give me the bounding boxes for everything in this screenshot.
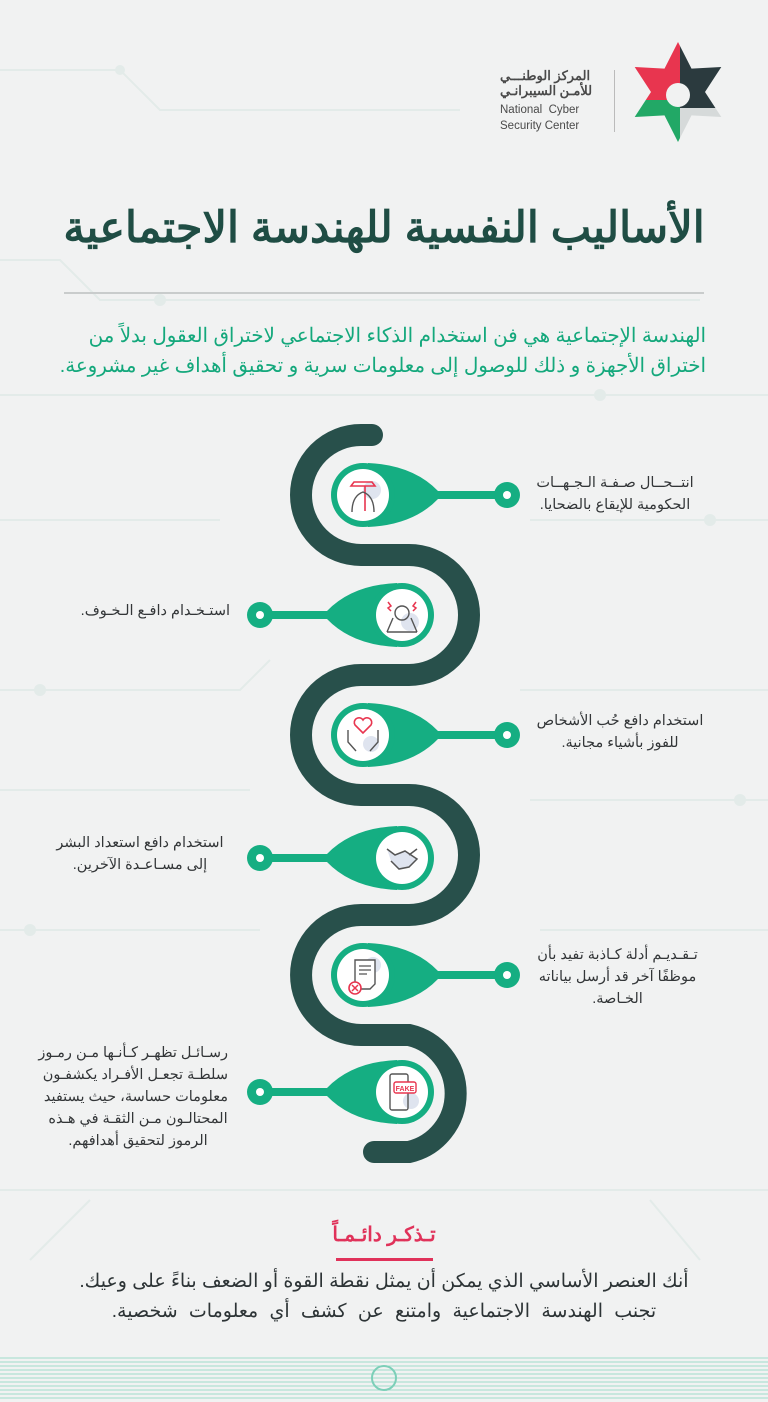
footer stripes — [0, 1358, 768, 1398]
node 1: impersonation — [331, 463, 520, 527]
logo text: National Cyber — [500, 104, 579, 116]
text 2: استـخـدام دافـع الـخـوف. — [81, 603, 230, 619]
title: الأساليب النفسية للهندسة الاجتماعية — [63, 204, 705, 252]
intro text — [60, 322, 706, 377]
node 4: helping — [247, 826, 434, 890]
text 3: استخدام دافع حُب الأشخاص — [537, 713, 703, 729]
logo star — [634, 42, 722, 142]
logo text: للأمـن السيبرانـي — [500, 83, 592, 98]
text 4 — [56, 835, 224, 873]
text 5 — [537, 944, 698, 1007]
logo text: المركز الوطنـــي — [500, 68, 590, 83]
node 5: fake evidence — [331, 943, 520, 1007]
logo — [500, 42, 722, 142]
text 4: إلى مسـاعـدة الآخرين. — [73, 857, 207, 873]
text 6: الرموز لتحقيق أهدافهم. — [68, 1133, 208, 1149]
remember text — [79, 1268, 689, 1322]
node 2: fear — [247, 583, 434, 647]
text 6: سلطـة تجعـل الأفـراد يكشفـون — [43, 1067, 228, 1083]
text 6: معلومات حساسة، حيث يستفيد — [44, 1089, 228, 1105]
text 5: الخـاصة. — [592, 991, 643, 1007]
logo text: Security Center — [500, 120, 579, 132]
text 6: رسـائـل تظهـر كـأنـها مـن رمـوز — [38, 1045, 228, 1061]
node 6: fake messages: FAKE — [396, 1086, 415, 1093]
text 3 — [537, 712, 703, 751]
text 4: استخدام دافع استعداد البشر — [56, 835, 224, 851]
text 1: انتــحــال صـفـة الـجـهــات — [536, 475, 694, 491]
intro text: اختراق الأجهزة و ذلك للوصول إلى معلومات سرية و تحقيق أهداف غير مشروعة. — [60, 355, 706, 377]
text 3: للفوز بأشياء مجانية. — [561, 735, 679, 751]
remember heading: تـذكـر دائـمـاً — [332, 1224, 436, 1246]
text 5: موظفًا آخر قد أرسل بياناته — [539, 969, 696, 985]
node 6: fake messages — [247, 1060, 434, 1124]
intro text: الهندسة الإجتماعية هي فن استخدام الذكاء الاجتماعي لاختراق العقول بدلاً من — [89, 325, 706, 347]
text 5: تـقـديـم أدلة كـاذبة تفيد بأن — [537, 947, 698, 963]
text 6 — [38, 1042, 228, 1149]
node 3: love — [331, 703, 520, 767]
remember text: أنك العنصر الأساسي الذي يمكن أن يمثل نقطة القوة أو الضعف بناءً على وعيك. — [79, 1271, 689, 1292]
remember text: تجنب الهندسة الاجتماعية وامتنع عن كشف أي معلومات شخصية. — [112, 1301, 656, 1322]
logo text — [500, 68, 592, 132]
text 6: المحتالـون مـن الثقـة في هـذه — [48, 1111, 228, 1127]
text 1: الحكومية للإيقاع بالضحايا. — [540, 497, 690, 513]
text 1 — [536, 475, 694, 513]
